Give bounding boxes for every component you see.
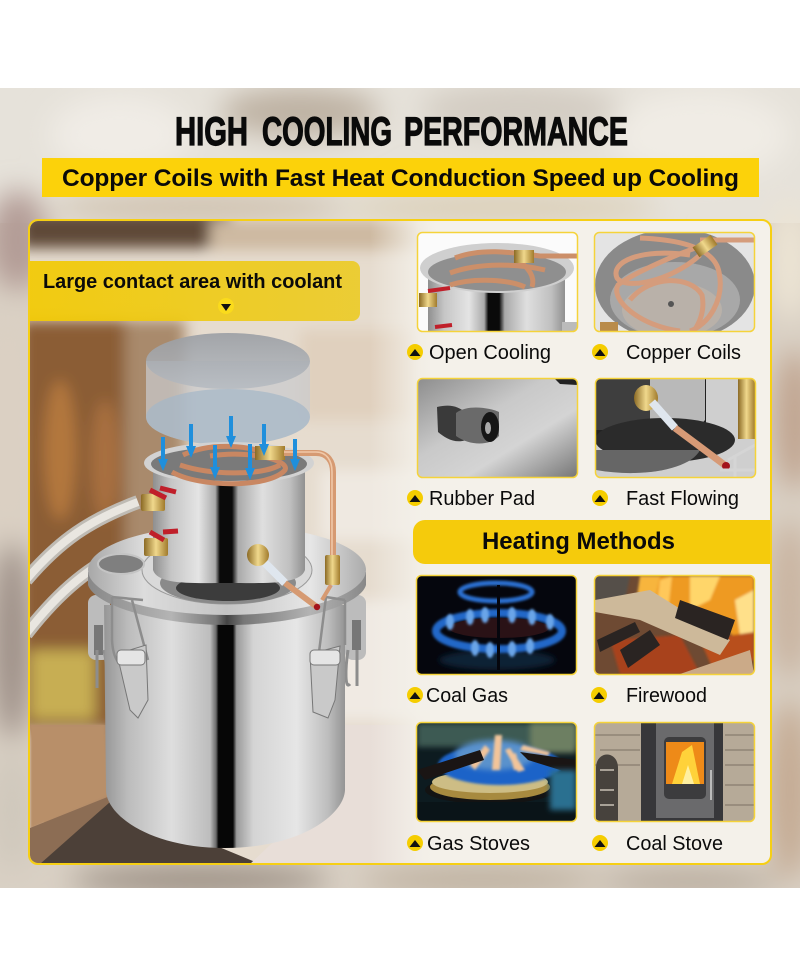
label: open cooling: Open Cooling <box>429 342 551 364</box>
tile: rubber pad <box>418 379 577 477</box>
pale floor <box>251 732 374 863</box>
title: HIGH <box>175 110 248 154</box>
tile: coal stove <box>595 723 754 821</box>
blue arrows <box>158 416 300 480</box>
thermometer <box>98 554 144 574</box>
heading bar: heating methods: Heating Methods <box>482 528 675 555</box>
left photo backdrop <box>30 221 422 863</box>
subtitle banner <box>42 158 759 197</box>
main panel <box>20 212 771 864</box>
label: coal gas: Coal Gas <box>426 685 508 707</box>
wooden table <box>30 725 112 864</box>
left hoses <box>26 502 146 634</box>
tile: fast flowing <box>595 379 755 477</box>
label: coal stove: Coal Stove <box>626 833 723 855</box>
title: PERFORMANCE <box>404 110 628 154</box>
tile: open cooling <box>418 233 578 331</box>
latches <box>112 597 345 718</box>
label: rubber pad: Rubber Pad <box>429 488 535 510</box>
heading bar: heating methods <box>413 520 771 564</box>
upper pot body <box>153 465 305 583</box>
cream fade over right half <box>376 221 438 863</box>
distiller product <box>26 333 366 848</box>
label: fast flowing: Fast Flowing <box>626 488 739 510</box>
icon: down arrow <box>218 298 234 314</box>
label: gas stoves: Gas Stoves <box>427 833 530 855</box>
title <box>175 110 628 154</box>
label: firewood: Firewood <box>626 685 707 707</box>
upper pot rim and coils <box>144 442 314 484</box>
copper inlet pipe <box>284 452 340 600</box>
valves <box>141 488 178 556</box>
callout: Large contact area with coolant <box>43 271 342 293</box>
subtitle banner: Copper Coils with Fast Heat Conduction Speed up Cooling <box>62 165 739 192</box>
tile borders <box>416 232 756 822</box>
lid <box>88 525 366 625</box>
outlet pipe <box>247 544 320 610</box>
lower pot side handles <box>88 595 366 688</box>
title: COOLING <box>262 110 392 154</box>
panel border <box>29 220 771 864</box>
tile: firewood <box>595 576 754 674</box>
water cylinder <box>146 333 310 445</box>
lower pot body <box>104 605 345 848</box>
tile: gas stoves <box>417 723 576 821</box>
tile: coal gas <box>417 576 576 674</box>
label: firewood <box>591 685 707 707</box>
label: copper coils: Copper Coils <box>626 342 741 364</box>
tile: copper coils <box>595 233 754 331</box>
callout <box>29 261 360 321</box>
